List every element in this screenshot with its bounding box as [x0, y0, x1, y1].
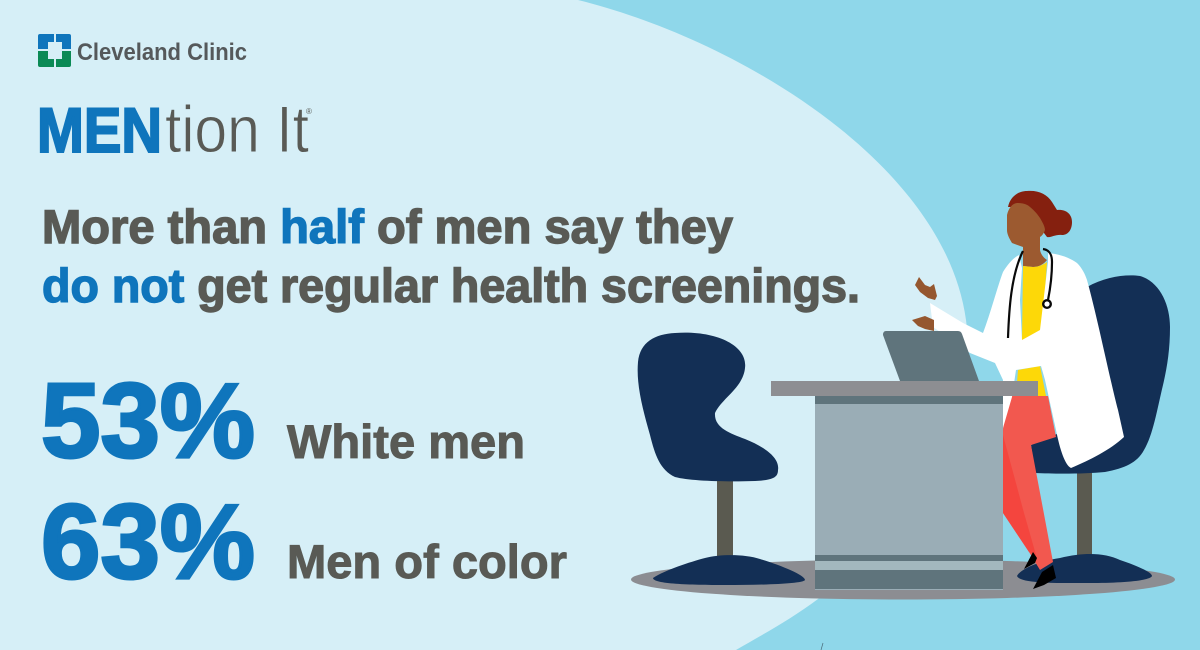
stethoscope — [1008, 249, 1052, 338]
illustration: doctor at desk — [631, 191, 1175, 599]
stat: 53% White men: 53% — [41, 362, 255, 480]
yellow shirt — [1022, 262, 1047, 340]
laptop — [883, 331, 979, 381]
stat: 63% Men of color: Men of color — [287, 535, 567, 588]
headline text — [42, 200, 860, 312]
stat: 63% Men of color — [41, 483, 567, 601]
headline text: do not get regular health screenings. — [42, 259, 860, 312]
white coat — [930, 253, 1124, 468]
heading: MENtion It: ® — [306, 107, 312, 116]
logo: Cleveland Clinic — [38, 34, 247, 67]
hands — [915, 277, 937, 300]
heading: MENtion It — [37, 92, 312, 166]
pants — [1003, 396, 1056, 570]
right chair — [1017, 275, 1170, 583]
stat: 63% Men of color: 63% — [41, 483, 255, 601]
doctor — [912, 191, 1124, 589]
heading: MENtion It: tion It — [165, 92, 309, 166]
headline text: More than half of men say they — [42, 200, 733, 253]
stat: 53% White men — [41, 362, 525, 480]
logo wordmark: Cleveland Clinic — [77, 39, 247, 66]
floor ellipse — [631, 560, 1175, 600]
shoes — [1024, 552, 1037, 569]
face and neck — [1007, 203, 1047, 267]
small mark at bottom — [821, 643, 823, 650]
stat: 53% White men: White men — [287, 415, 525, 468]
hair — [1008, 191, 1072, 237]
icon: Cleveland Clinic cross — [38, 34, 71, 67]
left chair — [638, 333, 805, 585]
desk — [771, 381, 1038, 590]
heading: MENtion It: MEN — [37, 96, 162, 166]
